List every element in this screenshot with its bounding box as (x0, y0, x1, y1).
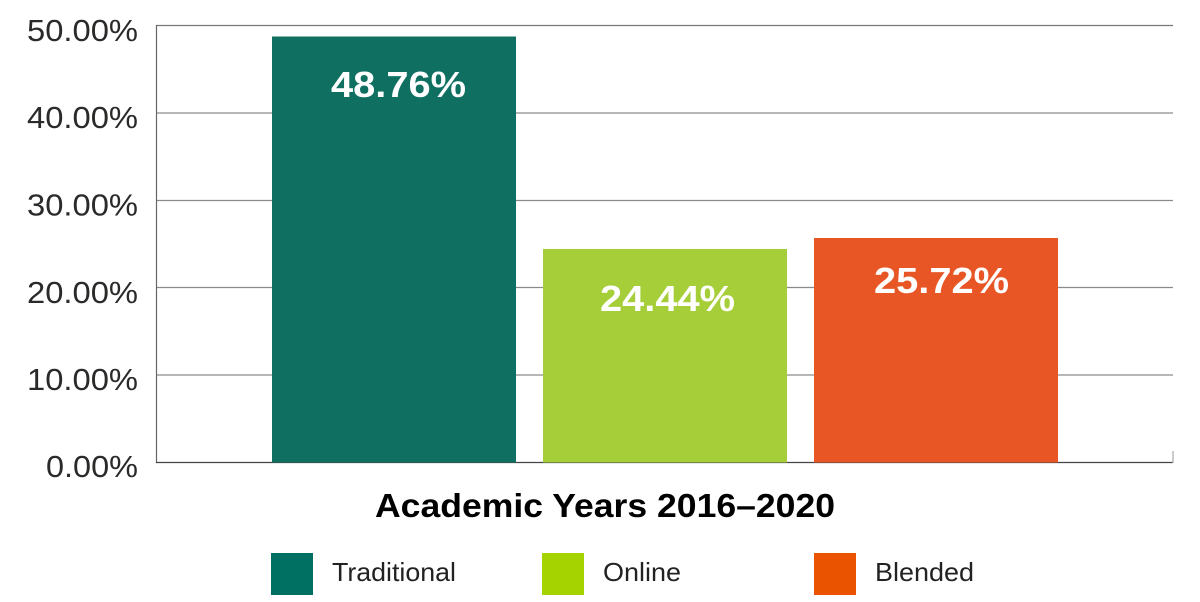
chart gridlines and axes (156, 25, 1173, 463)
legend item: Online (542, 553, 681, 595)
y-axis labels: 50.00% (27, 13, 138, 48)
bar: Traditional 48.76% (272, 36, 516, 462)
legend item: Blended (814, 553, 974, 595)
legend item: Blended: Blended (875, 557, 974, 587)
y-axis labels: 0.00% (46, 449, 138, 484)
bar: Blended 25.72%: 25.72% (874, 260, 1009, 301)
legend (271, 553, 974, 595)
y-axis labels: 40.00% (27, 100, 138, 135)
y-axis labels: 30.00% (27, 188, 138, 222)
legend item: Traditional (271, 553, 456, 595)
x-axis title: Academic Years 2016–2020 (375, 487, 835, 524)
legend item: Online: Online (603, 557, 681, 587)
bar: Online 24.44%: 24.44% (600, 278, 735, 319)
y-axis labels: 20.00% (27, 275, 138, 310)
y-axis labels: 10.00% (27, 362, 138, 397)
legend item: Traditional: Traditional (332, 557, 456, 587)
bar: Blended 25.72% (814, 238, 1058, 462)
bar: Traditional 48.76%: 48.76% (331, 64, 466, 105)
y-axis labels (27, 13, 138, 484)
bar: Online 24.44% (543, 249, 787, 462)
